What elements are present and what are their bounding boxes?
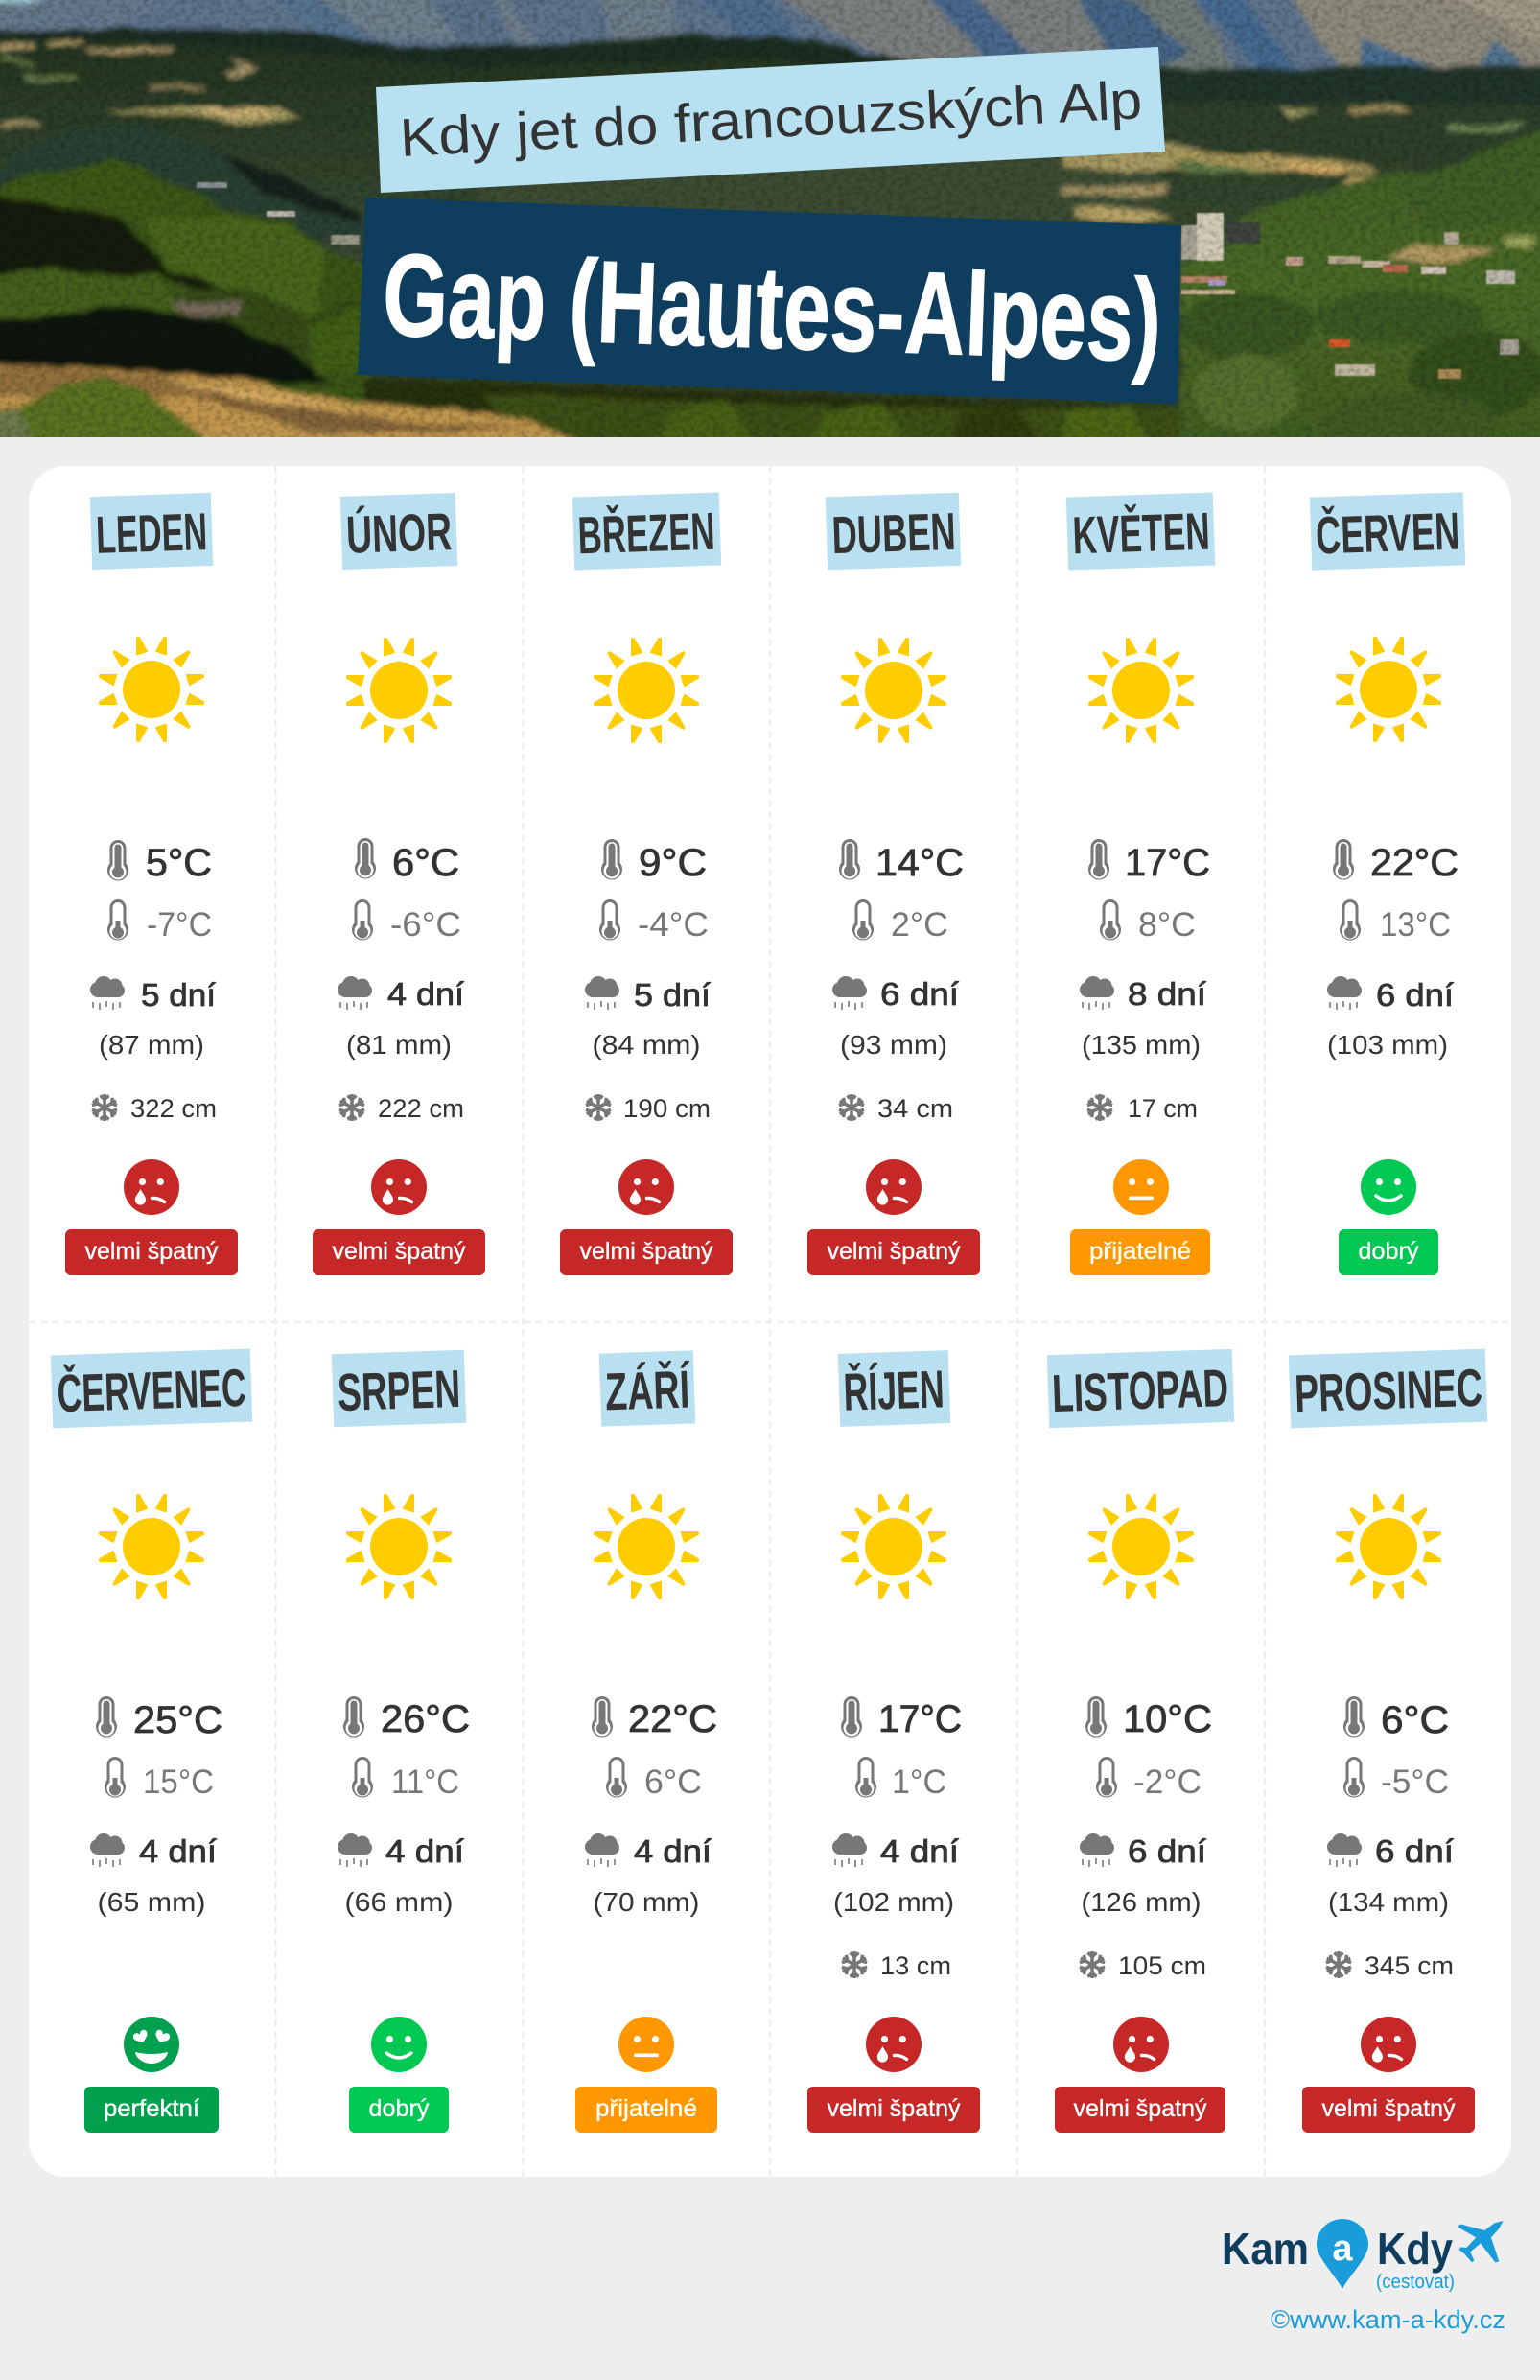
precipitation: (65 mm) (98, 1887, 205, 1917)
month heading: ZÁŘÍ (604, 1359, 691, 1421)
icon: map pin with letter a: a (1332, 2228, 1353, 2269)
low temperature: 13°C (1380, 906, 1451, 944)
precipitation: (87 mm) (99, 1030, 204, 1060)
rating badge: velmi špatný (332, 1238, 466, 1265)
low temperature (1100, 899, 1196, 944)
icon: sun (594, 638, 699, 743)
month heading (1310, 492, 1465, 571)
snowfall (1079, 1951, 1206, 1980)
rainy days (90, 976, 216, 1013)
rainy days (90, 1833, 217, 1869)
high temperature (841, 1696, 962, 1740)
high temperature (107, 840, 212, 884)
month: Srpen (332, 1350, 470, 2133)
month heading (1047, 1349, 1234, 1428)
rating badge: dobrý (1358, 1238, 1419, 1265)
icon: sun (346, 638, 452, 743)
precipitation: (103 mm) (1327, 1030, 1448, 1060)
low temperature (1343, 1757, 1449, 1801)
rainy days (585, 1833, 712, 1869)
low temperature (606, 1757, 702, 1801)
rainy days: 5 dní (634, 977, 711, 1013)
month heading (599, 1350, 695, 1427)
title banner: subtitle (376, 47, 1165, 193)
snowfall: 34 cm (877, 1094, 953, 1123)
high temperature: 6°C (392, 842, 459, 884)
rainy days: 4 dní (634, 1833, 712, 1869)
snowfall (338, 1094, 464, 1123)
rainy days (1080, 976, 1206, 1012)
rating badge: perfektní (104, 2095, 199, 2122)
low temperature: -2°C (1133, 1763, 1202, 1801)
precipitation: (102 mm) (833, 1887, 954, 1917)
rating badge: přijatelné (595, 2095, 697, 2122)
precipitation: (84 mm) (593, 1030, 700, 1060)
snowfall: 322 cm (130, 1094, 217, 1123)
rainy days (338, 1833, 464, 1869)
low temperature: -7°C (147, 906, 212, 944)
icon: rating face (371, 2017, 427, 2072)
high temperature: 17°C (1125, 842, 1210, 884)
month heading: ÚNOR (345, 502, 453, 565)
month: Leden (65, 493, 238, 1275)
month: Listopad (1047, 1349, 1234, 2133)
rating badge (560, 1229, 733, 1275)
month heading: BŘEZEN (577, 502, 716, 565)
rating badge: velmi špatný (1321, 2095, 1456, 2122)
icon: rating face (1361, 1159, 1416, 1215)
high temperature (1085, 1696, 1212, 1740)
high temperature (592, 1696, 717, 1740)
rainy days: 6 dní (1376, 977, 1454, 1013)
low temperature: -4°C (638, 906, 709, 944)
rating badge: velmi špatný (827, 1238, 961, 1265)
rainy days: 4 dní (139, 1833, 217, 1869)
rating badge: velmi špatný (84, 1238, 219, 1265)
high temperature (96, 1696, 222, 1741)
header photo: town, tower and houses (197, 182, 1519, 379)
logo wordmark: Kam: Kam (1222, 2224, 1309, 2274)
month: Prosinec (1289, 1349, 1487, 2133)
high temperature: 14°C (875, 842, 964, 884)
rainy days: 4 dní (880, 1833, 959, 1869)
low temperature: 11°C (391, 1763, 459, 1801)
icon: rating face (1113, 2017, 1169, 2072)
snowfall: 222 cm (378, 1094, 464, 1123)
title banner: main title (358, 198, 1181, 404)
low temperature (855, 1757, 946, 1801)
white calendar panel (29, 466, 1511, 2177)
month: Květen (1066, 493, 1215, 1275)
rainy days (1327, 1833, 1454, 1869)
rainy days (1080, 1833, 1206, 1869)
high temperature: 25°C (133, 1699, 222, 1741)
icon: sun (841, 638, 946, 743)
rainy days: 8 dní (1128, 976, 1206, 1012)
high temperature: 9°C (639, 842, 707, 884)
month heading: SRPEN (337, 1359, 461, 1422)
month heading (332, 1350, 466, 1427)
high temperature (355, 838, 459, 884)
month heading: LEDEN (95, 502, 208, 565)
low temperature: 6°C (644, 1763, 702, 1801)
month: Březen (560, 492, 733, 1275)
month heading (340, 493, 457, 570)
website address: ©www.kam-a-kdy.cz (1271, 2305, 1505, 2334)
rating badge (349, 2087, 449, 2133)
low temperature (1096, 1757, 1202, 1801)
icon: rating face (618, 1159, 674, 1215)
low temperature: 2°C (891, 906, 948, 944)
month heading (572, 492, 721, 570)
rainy days: 6 dní (1128, 1833, 1206, 1869)
snowfall (585, 1094, 711, 1123)
rainy days: 6 dní (880, 976, 959, 1012)
low temperature: -6°C (390, 906, 461, 944)
month: Červenec (51, 1349, 252, 2133)
icon: sun (346, 1494, 452, 1599)
rainy days (1327, 976, 1454, 1013)
rating badge (313, 1229, 485, 1275)
icon: rating face (1361, 2017, 1416, 2072)
high temperature: 5°C (146, 842, 212, 884)
high temperature: 22°C (628, 1698, 717, 1740)
month: Únor (313, 493, 485, 1275)
rainy days (832, 1833, 959, 1869)
icon: rating face (866, 2017, 922, 2072)
month: Říjen (807, 1350, 980, 2133)
rating badge: dobrý (368, 2095, 430, 2122)
icon: airplane (1458, 2221, 1504, 2262)
month heading: DUBEN (831, 502, 957, 565)
logo tagline: (cestovat) (1376, 2272, 1455, 2293)
high temperature (1343, 1696, 1449, 1741)
icon: rating face (1113, 1159, 1169, 1215)
icon: map pin with letter a (1317, 2219, 1368, 2289)
rating badge (65, 1229, 238, 1275)
title banner: subtitle: Kdy jet do francouzských Alp (398, 69, 1144, 168)
precipitation: (134 mm) (1328, 1887, 1449, 1917)
rainy days: 4 dní (387, 976, 464, 1012)
snowfall (91, 1094, 217, 1123)
high temperature (839, 839, 964, 884)
low temperature (852, 899, 948, 944)
low temperature: 1°C (892, 1763, 946, 1801)
month heading: ČERVENEC (57, 1358, 247, 1423)
month heading: LISTOPAD (1051, 1358, 1229, 1423)
rating badge: velmi špatný (1074, 2095, 1207, 2122)
icon: rating face (124, 2017, 179, 2072)
high temperature: 26°C (381, 1698, 470, 1740)
title banner: main title: Gap (Hautes-Alpes) (381, 229, 1163, 386)
high temperature (601, 839, 707, 884)
icon: rating face (618, 2017, 674, 2072)
low temperature (107, 899, 212, 944)
month heading (51, 1349, 252, 1428)
snowfall (1325, 1951, 1454, 1980)
rating badge (807, 2087, 980, 2133)
icon: rating face (371, 1159, 427, 1215)
low temperature: -5°C (1381, 1763, 1449, 1801)
rainy days: 6 dní (1375, 1833, 1454, 1869)
snowfall: 105 cm (1118, 1951, 1206, 1980)
low temperature (105, 1757, 214, 1801)
high temperature: 22°C (1370, 842, 1458, 884)
high temperature: 17°C (878, 1698, 962, 1740)
rating badge (1302, 2087, 1475, 2133)
logo: Kam a Kdy (1222, 2219, 1505, 2334)
rating badge (1339, 1229, 1438, 1275)
rainy days: 5 dní (141, 977, 216, 1013)
snowfall (838, 1094, 953, 1123)
icon: sun (1336, 637, 1441, 742)
high temperature: 6°C (1381, 1699, 1449, 1741)
snowfall: 17 cm (1128, 1094, 1198, 1123)
snowfall (1086, 1094, 1198, 1123)
snowfall: 13 cm (880, 1951, 951, 1980)
icon: sun (1088, 1494, 1194, 1599)
rainy days (832, 976, 959, 1012)
precipitation: (66 mm) (345, 1887, 453, 1917)
icon: sun (1088, 638, 1194, 743)
month: Červen (1310, 492, 1465, 1275)
high temperature (343, 1696, 470, 1740)
rating badge (1070, 1229, 1210, 1275)
rating badge: velmi špatný (827, 2095, 961, 2122)
month: Duben (807, 493, 980, 1275)
rating badge (1055, 2087, 1225, 2133)
rainy days: 4 dní (385, 1833, 464, 1869)
snowfall (841, 1951, 951, 1980)
low temperature (352, 899, 461, 944)
snowfall: 190 cm (623, 1094, 711, 1123)
high temperature: 10°C (1123, 1698, 1212, 1740)
month heading (1066, 493, 1215, 571)
month heading (826, 493, 961, 570)
low temperature (1340, 899, 1451, 944)
icon: rating face (124, 1159, 179, 1215)
high temperature (1333, 839, 1458, 884)
low temperature (599, 899, 709, 944)
rating badge (84, 2087, 219, 2133)
icon: sun (99, 1494, 204, 1599)
high temperature (1088, 839, 1210, 884)
rainy days (585, 976, 711, 1013)
rating badge (575, 2087, 717, 2133)
month heading (90, 493, 213, 570)
header photo: alpine valley landscape (0, 0, 1540, 451)
snowfall: 345 cm (1365, 1951, 1454, 1980)
low temperature: 15°C (143, 1763, 214, 1801)
low temperature (352, 1757, 459, 1801)
icon: rating face (866, 1159, 922, 1215)
rating badge: přijatelné (1089, 1238, 1191, 1265)
logo wordmark: Kdy: Kdy (1377, 2224, 1453, 2274)
month heading (838, 1350, 950, 1427)
month heading: ŘÍJEN (843, 1359, 945, 1422)
icon: sun (841, 1494, 946, 1599)
rating badge (807, 1229, 980, 1275)
icon: sun (594, 1494, 699, 1599)
precipitation: (135 mm) (1082, 1030, 1201, 1060)
low temperature: 8°C (1138, 906, 1196, 944)
precipitation: (70 mm) (593, 1887, 700, 1917)
month heading (1289, 1349, 1487, 1428)
precipitation: (81 mm) (346, 1030, 452, 1060)
icon: sun (99, 637, 204, 742)
month heading: KVĚTEN (1072, 502, 1211, 565)
icon: sun (1336, 1494, 1441, 1599)
month heading: ČERVEN (1315, 502, 1460, 565)
month: Září (575, 1350, 717, 2133)
precipitation: (126 mm) (1081, 1887, 1202, 1917)
precipitation: (93 mm) (840, 1030, 947, 1060)
rainy days (338, 976, 464, 1012)
rating badge: velmi špatný (579, 1238, 713, 1265)
